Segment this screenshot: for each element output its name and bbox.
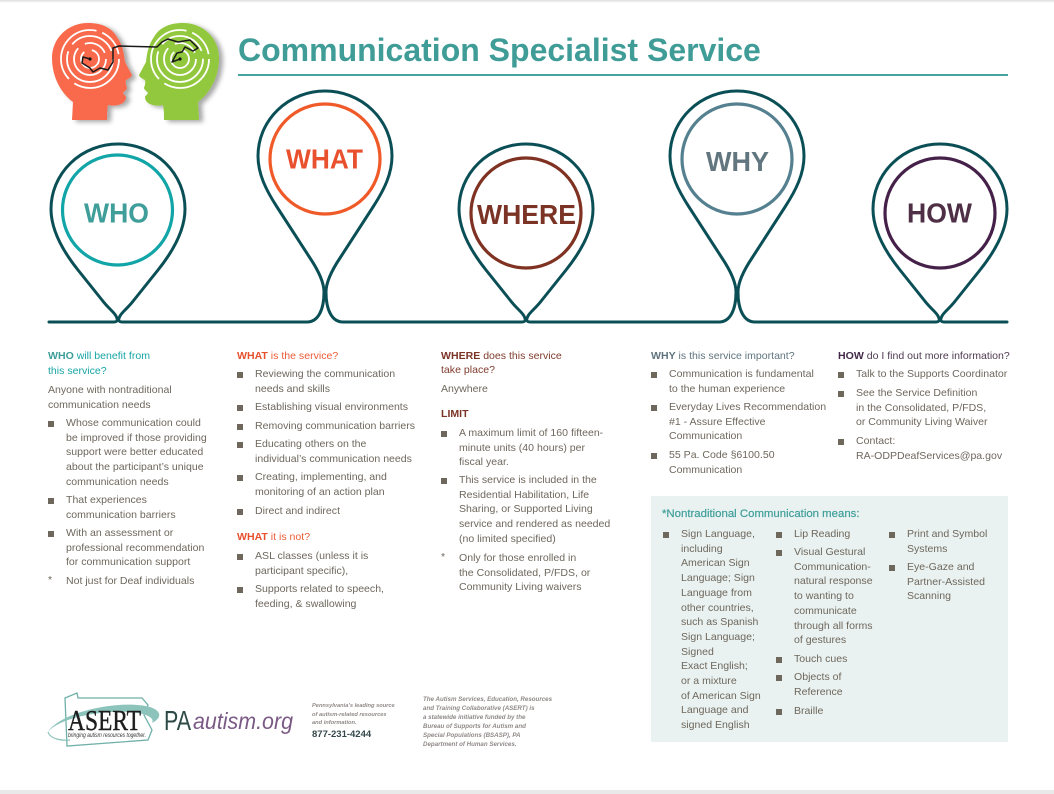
title underline <box>238 74 1008 76</box>
tagline: of autism-related resources <box>312 712 387 718</box>
who intro: communication needs <box>48 399 151 411</box>
how list: or Community Living Waiver <box>856 416 987 428</box>
list column 3 <box>889 528 987 602</box>
who list: That experiences <box>66 494 147 506</box>
limit list: Community Living waivers <box>459 581 582 593</box>
title: Communication Specialist Service <box>238 32 761 68</box>
limit list: A maximum limit of 160 fifteen- <box>459 427 603 439</box>
who pin <box>62 155 172 265</box>
list column 1: Language and <box>681 704 748 716</box>
why list: to the human experience <box>669 383 785 395</box>
who list: support were better educated <box>66 446 203 458</box>
panel: how <box>838 350 1010 462</box>
list column 2 <box>776 528 873 717</box>
list column 1: Sign Language, <box>681 528 755 540</box>
where pin <box>471 158 581 268</box>
list column 1: such as Spanish <box>681 616 758 628</box>
top edge band <box>0 0 1054 3</box>
list column 1: Exact English; <box>681 660 748 672</box>
what not list: participant specific), <box>255 565 348 577</box>
list column 3: Eye-Gaze and <box>907 561 974 573</box>
who list: about the participant’s unique <box>66 461 204 473</box>
limit list: Residential Habilitation, Life <box>459 489 589 501</box>
list column 2: Braille <box>794 705 823 717</box>
about ASERT text: The Autism Services, Education, Resources <box>423 696 552 703</box>
what pin <box>270 104 380 214</box>
what list: Reviewing the communication <box>255 368 395 380</box>
where pin: WHERE <box>477 199 576 230</box>
panel: who <box>48 350 207 587</box>
list column 3: Scanning <box>907 590 951 602</box>
what heading: WHAT is the service? <box>237 350 338 362</box>
list column 1: Signed <box>681 646 714 658</box>
who heading: this service? <box>48 365 107 377</box>
who list <box>48 417 207 587</box>
how list: See the Service Definition <box>856 387 977 399</box>
limit list <box>441 427 610 593</box>
what not list: ASL classes (unless it is <box>255 550 368 562</box>
list column 1: of American Sign <box>681 690 761 702</box>
who list: With an assessment or <box>66 527 173 539</box>
list column 1: Sign Language; <box>681 631 755 643</box>
what list: monitoring of an action plan <box>255 486 385 498</box>
limit list: minute units (40 hours) per <box>459 442 585 454</box>
how list <box>838 368 1008 462</box>
list column 2: Communication- <box>794 561 871 573</box>
limit heading: LIMIT <box>441 408 469 420</box>
box heading: *Nontraditional Communication means: <box>662 508 860 520</box>
phone number: 877-231-4244 <box>312 729 371 740</box>
how heading: HOW do I find out more information? <box>838 350 1010 362</box>
about ASERT text: a statewide initiative funded by the <box>423 714 525 721</box>
about ASERT text: Special Populations (BSASP), PA <box>423 732 521 739</box>
why heading: WHY is this service important? <box>651 350 795 362</box>
list column 1: American Sign <box>681 557 750 569</box>
panel: what <box>237 350 415 610</box>
limit list: This service is included in the <box>459 474 597 486</box>
list column 2: Objects of <box>794 671 841 683</box>
how list: Contact: <box>856 435 895 447</box>
limit list: fiscal year. <box>459 456 509 468</box>
list column 2: Reference <box>794 686 843 698</box>
list column 2: of gestures <box>794 634 846 646</box>
limit list: the Consolidated, P/FDS, or <box>459 567 590 579</box>
where heading: take place? <box>441 364 495 376</box>
icon: two heads with maze <box>52 22 226 125</box>
list column 1: or a mixture <box>681 675 737 687</box>
what list: Direct and indirect <box>255 505 340 517</box>
logo: ASERT PAautism.org: autism.org <box>193 708 293 734</box>
who list: communication barriers <box>66 509 176 521</box>
about ASERT text <box>423 696 552 748</box>
list column 3: Partner-Assisted <box>907 576 985 588</box>
list column 3: Print and Symbol <box>907 528 987 540</box>
list column 2: Visual Gestural <box>794 546 865 558</box>
what list: Removing communication barriers <box>255 420 415 432</box>
where heading: WHERE does this service <box>441 350 562 362</box>
what list: individual’s communication needs <box>255 453 412 465</box>
who list: professional recommendation <box>66 542 204 554</box>
what list: Educating others on the <box>255 438 366 450</box>
panel: nontraditional communication <box>651 496 1008 742</box>
logo: ASERT PAautism.org: PA <box>164 705 191 736</box>
what list: Creating, implementing, and <box>255 471 387 483</box>
why pin <box>682 104 792 214</box>
list column 1: Language from <box>681 587 752 599</box>
list column 2: Touch cues <box>794 653 847 665</box>
logo: ASERT PAautism.org <box>48 692 293 747</box>
list column 1: signed English <box>681 719 750 731</box>
panel: where <box>441 350 610 593</box>
what not list: Supports related to speech, <box>255 583 384 595</box>
why list: Communication is fundamental <box>669 368 814 380</box>
how list: RA-ODPDeafServices@pa.gov <box>856 450 1002 462</box>
limit list: Sharing, or Supported Living <box>459 503 593 515</box>
list column 1 <box>663 528 761 731</box>
who list: be improved if those providing <box>66 432 207 444</box>
about ASERT text: Bureau of Supports for Autism and <box>423 723 526 730</box>
what list: Establishing visual environments <box>255 401 408 413</box>
what list <box>237 368 415 517</box>
limit list: service and rendered as needed <box>459 518 610 530</box>
who list: Not just for Deaf individuals <box>66 575 194 587</box>
how pin: HOW <box>907 198 972 228</box>
pin timeline: who what where why how <box>48 90 1008 324</box>
logo: ASERT PAautism.org: bringing autism resources together. <box>68 732 146 739</box>
list column 2: through all forms <box>794 620 873 632</box>
who pin: WHO <box>84 198 149 228</box>
list column 2: communicate <box>794 605 857 617</box>
limit list: Only for those enrolled in <box>459 552 576 564</box>
list column 1: including <box>681 543 723 555</box>
why list: 55 Pa. Code §6100.50 <box>669 449 775 461</box>
what pin: WHAT <box>286 144 363 174</box>
tagline <box>312 703 395 726</box>
about ASERT text: Department of Human Services. <box>423 741 517 748</box>
about ASERT text: and Training Collaborative (ASERT) is <box>423 705 535 712</box>
list column 2: to wanting to <box>794 590 854 602</box>
who list: Whose communication could <box>66 417 201 429</box>
where heading <box>441 350 562 376</box>
logo: ASERT PAautism.org: ASERT <box>68 705 141 737</box>
list column 2: Lip Reading <box>794 528 850 540</box>
how list: in the Consolidated, P/FDS, <box>856 402 986 414</box>
why pin: WHY <box>706 146 769 177</box>
who heading <box>48 350 150 377</box>
tagline: and information. <box>312 720 357 726</box>
why list: Communication <box>669 464 742 476</box>
what list: needs and skills <box>255 383 330 395</box>
list column 2: natural response <box>794 575 873 587</box>
how pin <box>885 158 995 268</box>
who intro <box>48 384 172 411</box>
who list: for communication support <box>66 556 190 568</box>
bottom edge band <box>0 790 1054 794</box>
panel: why <box>651 350 826 476</box>
what not list: feeding, & swallowing <box>255 598 356 610</box>
tagline: Pennsylvania’s leading source <box>312 703 395 709</box>
list column 1: other countries, <box>681 602 754 614</box>
list column 1: Language; Sign <box>681 572 755 584</box>
how list: Talk to the Supports Coordinator <box>856 368 1007 380</box>
why list: Communication <box>669 430 742 442</box>
list column 3: Systems <box>907 543 947 555</box>
limit list: (no limited specified) <box>459 533 556 545</box>
where answer: Anywhere <box>441 383 488 395</box>
what not heading: WHAT it is not? <box>237 531 310 543</box>
why list: #1 - Assure Effective <box>669 416 766 428</box>
who heading: WHO will benefit from <box>48 350 150 362</box>
why list <box>651 368 826 476</box>
what not list <box>237 550 384 610</box>
who list: communication needs <box>66 476 169 488</box>
why list: Everyday Lives Recommendation <box>669 401 826 413</box>
who intro: Anyone with nontraditional <box>48 384 172 396</box>
